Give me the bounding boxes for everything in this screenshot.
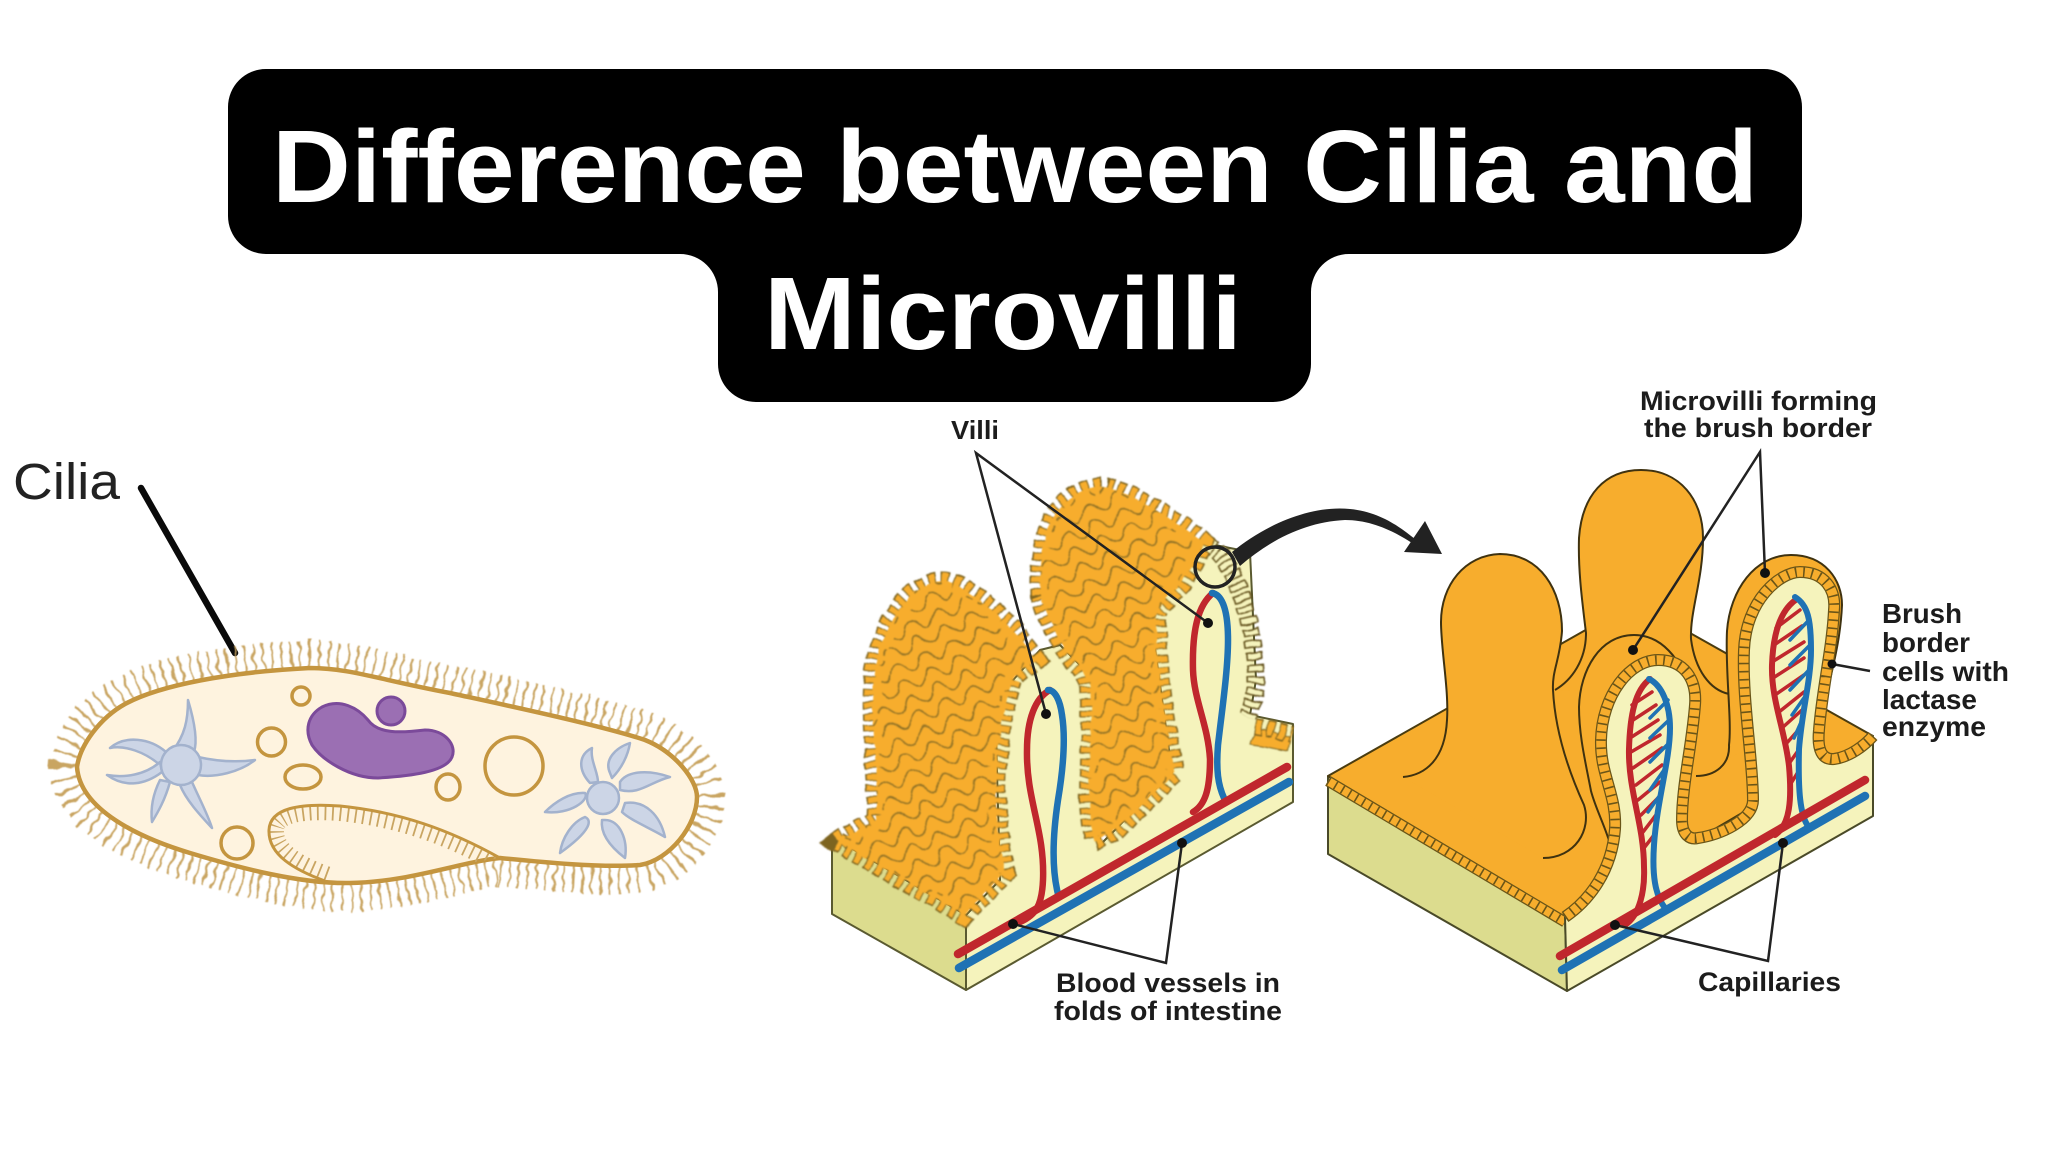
label: microvilli forming the brush border: Microvilli forming — [1640, 386, 1877, 416]
micronucleus — [377, 697, 405, 725]
block floor — [1328, 602, 1873, 917]
capillaries leader lines — [1610, 838, 1788, 961]
capillaries — [1560, 597, 1865, 970]
label: brush border cells: Brush — [1882, 598, 1962, 629]
label: blood vessels: folds of intestine — [1054, 996, 1282, 1026]
panel: paramecium with cilia — [13, 453, 697, 883]
label: brush border cells: border — [1882, 627, 1970, 658]
back villus — [1555, 470, 1729, 694]
cell body — [77, 668, 697, 883]
title banner — [228, 69, 1802, 402]
hatched brush border — [1565, 572, 1873, 917]
cilia pointer line — [141, 488, 235, 653]
right base fringe — [1250, 726, 1292, 752]
label: Villi: Villi — [951, 415, 999, 445]
panel: microvilli diagram — [1328, 386, 2017, 997]
left contractile vacuole star — [107, 700, 255, 828]
right contractile vacuole star — [545, 743, 670, 858]
label: blood vessels: Blood vessels in — [1056, 968, 1280, 998]
blood vessels — [958, 593, 1289, 968]
right villus outer surface — [1696, 555, 1842, 776]
block left face — [1328, 776, 1567, 991]
front villus outer surface — [1579, 635, 1696, 850]
cut cross-section face — [1565, 572, 1873, 991]
oral groove — [269, 805, 500, 881]
title background shape — [228, 69, 1802, 402]
base block left face — [832, 837, 966, 990]
left villus — [1403, 554, 1586, 858]
blood vessels leader lines — [1008, 838, 1187, 963]
label: brush border cells: cells with — [1882, 656, 2009, 687]
title line 2: Microvilli — [764, 256, 1242, 371]
label: capillaries: Capillaries — [1698, 967, 1841, 997]
arrow: magnification arrow — [1232, 508, 1442, 566]
cream cross-section — [966, 542, 1293, 990]
label: Cilia: Cilia — [13, 453, 121, 510]
cilia hairs — [77, 668, 697, 883]
label: brush border cells: lactase — [1882, 684, 1977, 715]
left villus folded surface — [838, 582, 1036, 915]
right fringe of cross-section — [1208, 545, 1256, 716]
magnified area circle — [1195, 547, 1235, 587]
label: microvilli forming the brush border: the brush border — [1644, 413, 1873, 443]
vacuoles — [221, 687, 543, 859]
macronucleus — [308, 704, 453, 778]
right villus folded surface — [1040, 487, 1203, 841]
title line 1: Difference between Cilia and — [272, 109, 1758, 224]
label: brush border cells: enzyme — [1882, 711, 1986, 742]
brush border leader line — [1828, 660, 1870, 671]
villi leader lines — [976, 453, 1213, 719]
brush border along left edge — [1328, 781, 1565, 922]
microvilli leader lines — [1628, 452, 1770, 655]
panel: villi diagram — [832, 415, 1293, 1026]
